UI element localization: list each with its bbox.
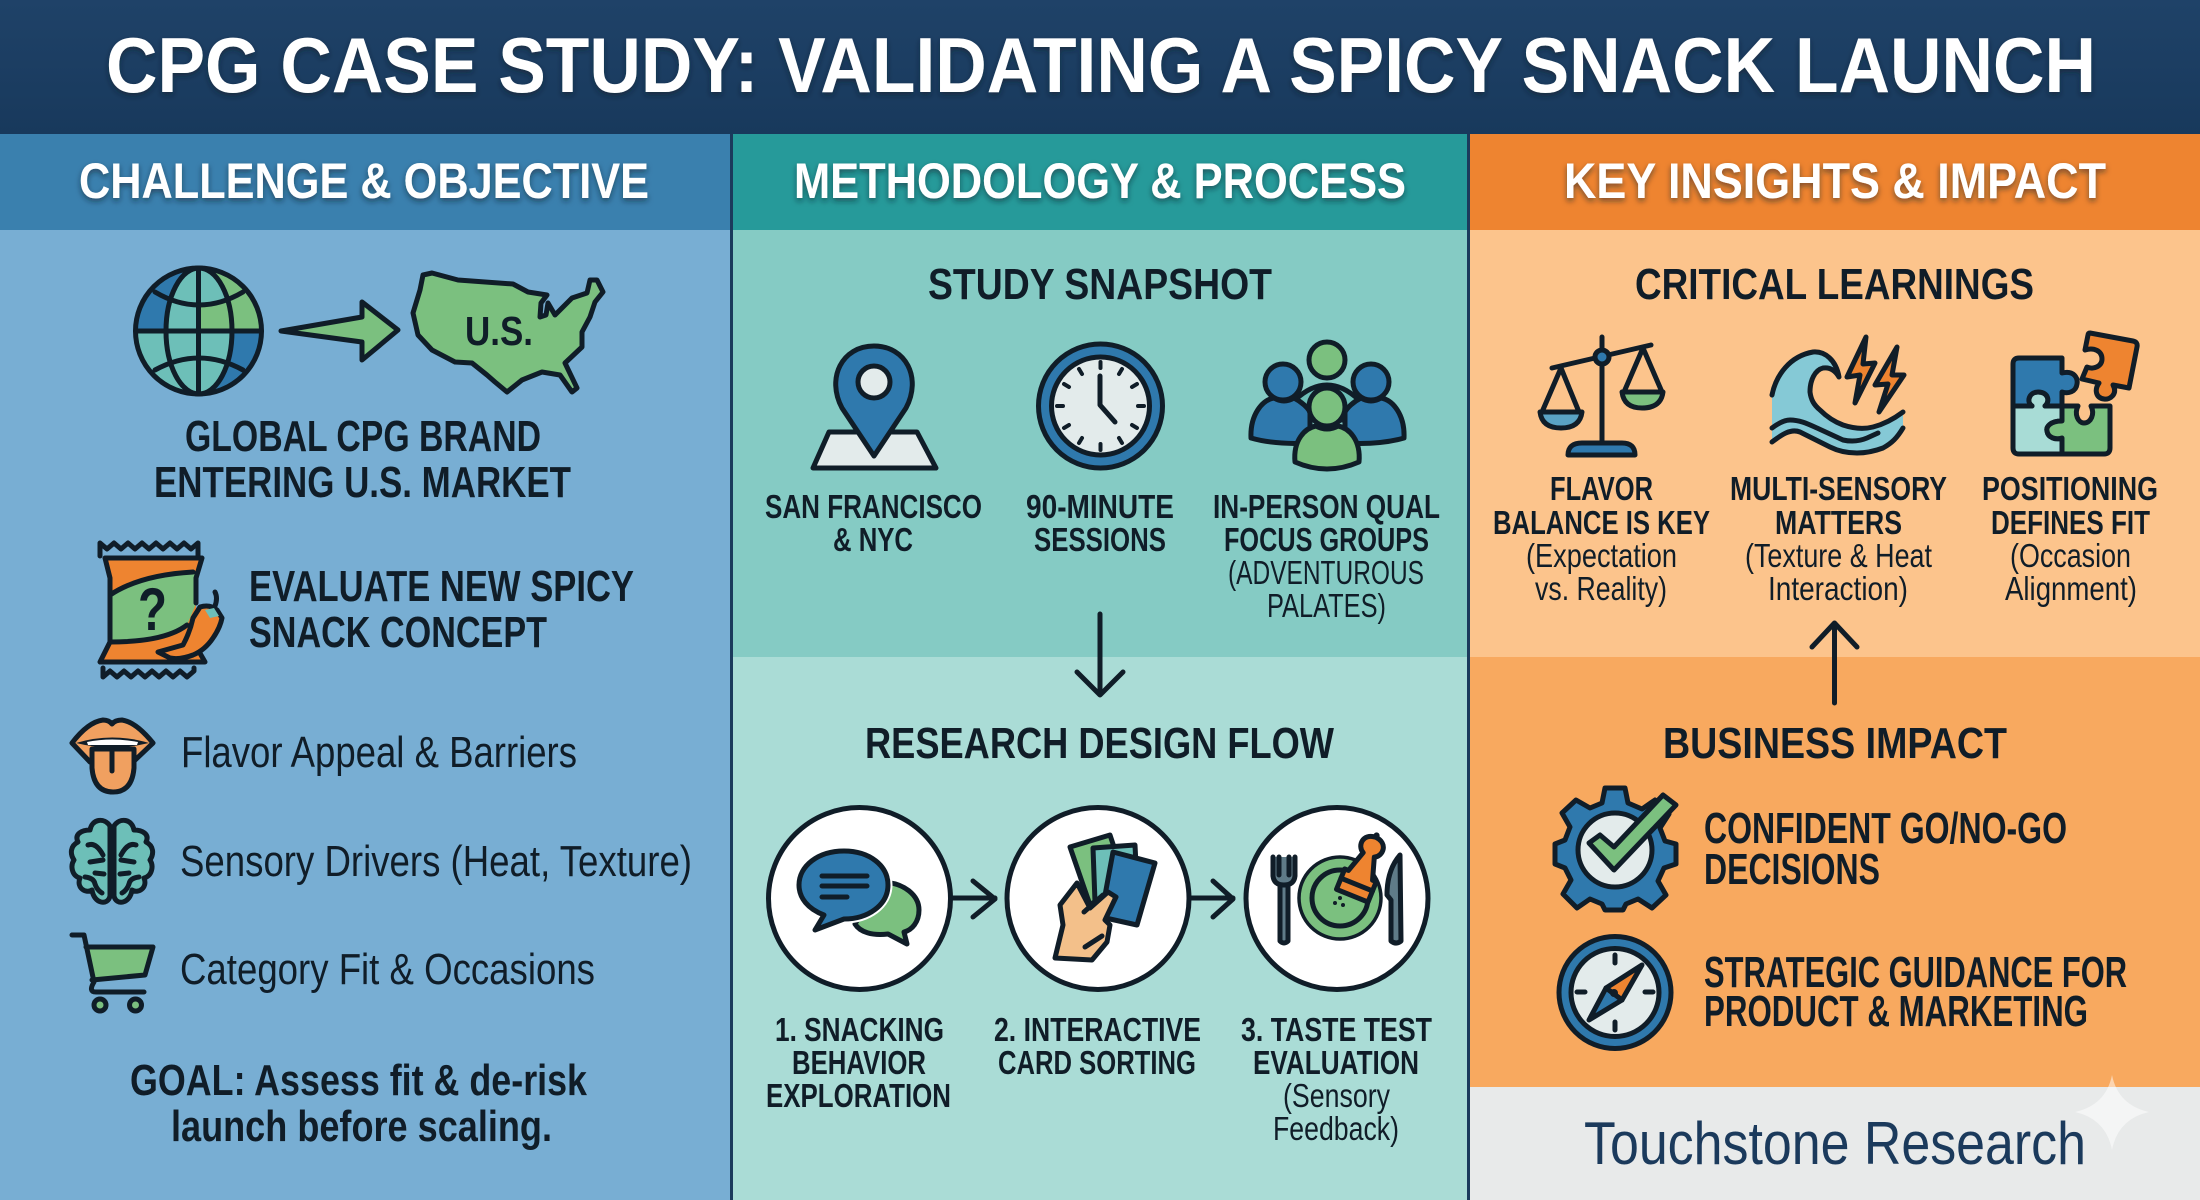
text: goal: GOAL: Assess fit & de-risk (130, 1056, 587, 1105)
label: step 2: CARD SORTING (998, 1044, 1196, 1081)
panel: challenge and objective (0, 134, 731, 1200)
label: step 1: 1. SNACKING (775, 1011, 944, 1048)
icon: U.S. map: U.S. (465, 308, 533, 354)
icon: focus group people (1251, 342, 1404, 469)
text: evaluate concept: SNACK CONCEPT (249, 608, 547, 657)
label: location: SAN FRANCISCO (765, 488, 982, 525)
icon: brain (71, 820, 153, 902)
label: focus groups: PALATES) (1267, 587, 1386, 624)
arrow: step 2 to 3 (1191, 881, 1233, 917)
step 3 icon: plate, cutlery and pepper mill (1246, 808, 1428, 990)
label: location (765, 488, 982, 558)
label: step 3: Feedback) (1273, 1110, 1399, 1147)
text: global brand: ENTERING U.S. MARKET (154, 458, 571, 507)
label: focus groups: (ADVENTUROUS (1228, 554, 1424, 591)
label: flavor balance: FLAVOR (1550, 470, 1653, 507)
text: global brand (154, 412, 571, 507)
icon: location pin (813, 346, 936, 468)
heading: critical learnings: CRITICAL LEARNINGS (1635, 260, 2034, 309)
label: step 2 (994, 1011, 1201, 1081)
heading: business impact: BUSINESS IMPACT (1663, 719, 2007, 768)
icon: puzzle pieces (2013, 333, 2137, 454)
column header: key insights and impact: KEY INSIGHTS & IMPACT (1564, 153, 2106, 209)
label: strategic guidance (1704, 948, 2127, 1036)
label: category fit: Category Fit & Occasions (180, 945, 595, 994)
step 2 icon: card sorting hand (1007, 808, 1189, 990)
label: step 3: EVALUATION (1253, 1044, 1419, 1081)
label: go/no-go: DECISIONS (1704, 845, 1880, 894)
text: evaluate concept: EVALUATE NEW SPICY (249, 562, 634, 611)
label: focus groups: FOCUS GROUPS (1224, 521, 1429, 558)
icon: shopping cart (72, 935, 153, 1011)
label: flavor appeal: Flavor Appeal & Barriers (181, 728, 577, 777)
heading: research design flow: RESEARCH DESIGN FLOW (865, 719, 1334, 768)
label: location: & NYC (833, 521, 913, 558)
label: positioning: Alignment) (2005, 570, 2137, 607)
label: positioning: DEFINES FIT (1991, 504, 2150, 541)
label: step 3 (1241, 1011, 1432, 1147)
icon: U.S. map (413, 273, 603, 392)
icon: tongue and lips (72, 720, 153, 792)
icon: balance scale (1540, 337, 1663, 455)
label: session length (1026, 488, 1174, 558)
icon: clock (1038, 344, 1162, 468)
label: go/no-go (1704, 804, 2067, 894)
footer: Touchstone Research (1468, 1087, 2200, 1200)
text: goal: launch before scaling. (171, 1102, 552, 1151)
label: session length: 90-MINUTE (1026, 488, 1174, 525)
icon: snack bag with chili: ? (138, 576, 167, 643)
label: focus groups (1213, 488, 1440, 624)
panel: key insights and impact (1468, 134, 2200, 1200)
label: go/no-go: CONFIDENT GO/NO-GO (1704, 804, 2067, 853)
column header: methodology and process: METHODOLOGY & PROCESS (794, 153, 1406, 209)
title banner (0, 0, 2200, 134)
label: multi-sensory: MATTERS (1775, 504, 1902, 541)
arrow: impact to learnings (1812, 623, 1857, 703)
panel: methodology and process (731, 134, 1468, 1200)
label: step 2: 2. INTERACTIVE (994, 1011, 1201, 1048)
label: focus groups: IN-PERSON QUAL (1213, 488, 1440, 525)
icon: compass (1559, 936, 1671, 1048)
column header: key insights and impact (1468, 134, 2200, 230)
icon: wave and lightning (1772, 337, 1904, 453)
label: step 1: BEHAVIOR (792, 1044, 926, 1081)
text: goal (130, 1056, 587, 1151)
arrow: global to U.S. (281, 302, 398, 360)
label: positioning: (Occasion (2010, 537, 2131, 574)
text: global brand: GLOBAL CPG BRAND (185, 412, 541, 461)
label: step 1 (766, 1011, 951, 1114)
label: multi-sensory (1730, 470, 1947, 607)
label: multi-sensory: Interaction) (1768, 570, 1908, 607)
column header: methodology and process (731, 134, 1468, 230)
label: step 3: 3. TASTE TEST (1241, 1011, 1432, 1048)
arrow: snapshot to flow (1077, 614, 1123, 695)
text: evaluate concept (249, 562, 634, 657)
arrow: step 1 to 2 (952, 881, 995, 917)
label: flavor balance: BALANCE IS KEY (1493, 504, 1710, 541)
label: flavor balance (1493, 470, 1710, 607)
step 1 icon: chat bubbles (768, 808, 950, 990)
label: multi-sensory: MULTI-SENSORY (1730, 470, 1947, 507)
label: session length: SESSIONS (1034, 521, 1166, 558)
icon: globe (135, 268, 262, 394)
icon: snack bag with chili (100, 543, 222, 677)
label: positioning: POSITIONING (1982, 470, 2158, 507)
label: multi-sensory: (Texture & Heat (1745, 537, 1932, 574)
column header: challenge and objective (0, 134, 731, 230)
label: flavor balance: (Expectation (1526, 537, 1677, 574)
icon: gear with check (1555, 788, 1676, 910)
footer: Touchstone Research: Touchstone Research (1584, 1110, 2086, 1177)
heading: study snapshot: STUDY SNAPSHOT (928, 260, 1272, 309)
label: step 1: EXPLORATION (766, 1077, 951, 1114)
label: flavor balance: vs. Reality) (1535, 570, 1667, 607)
decorative sparkle (2075, 1075, 2149, 1150)
label: step 3: (Sensory (1283, 1077, 1390, 1114)
column header: challenge and objective: CHALLENGE & OBJECTIVE (79, 153, 649, 209)
label: positioning (1982, 470, 2158, 607)
label: sensory drivers: Sensory Drivers (Heat, Texture) (180, 837, 692, 886)
